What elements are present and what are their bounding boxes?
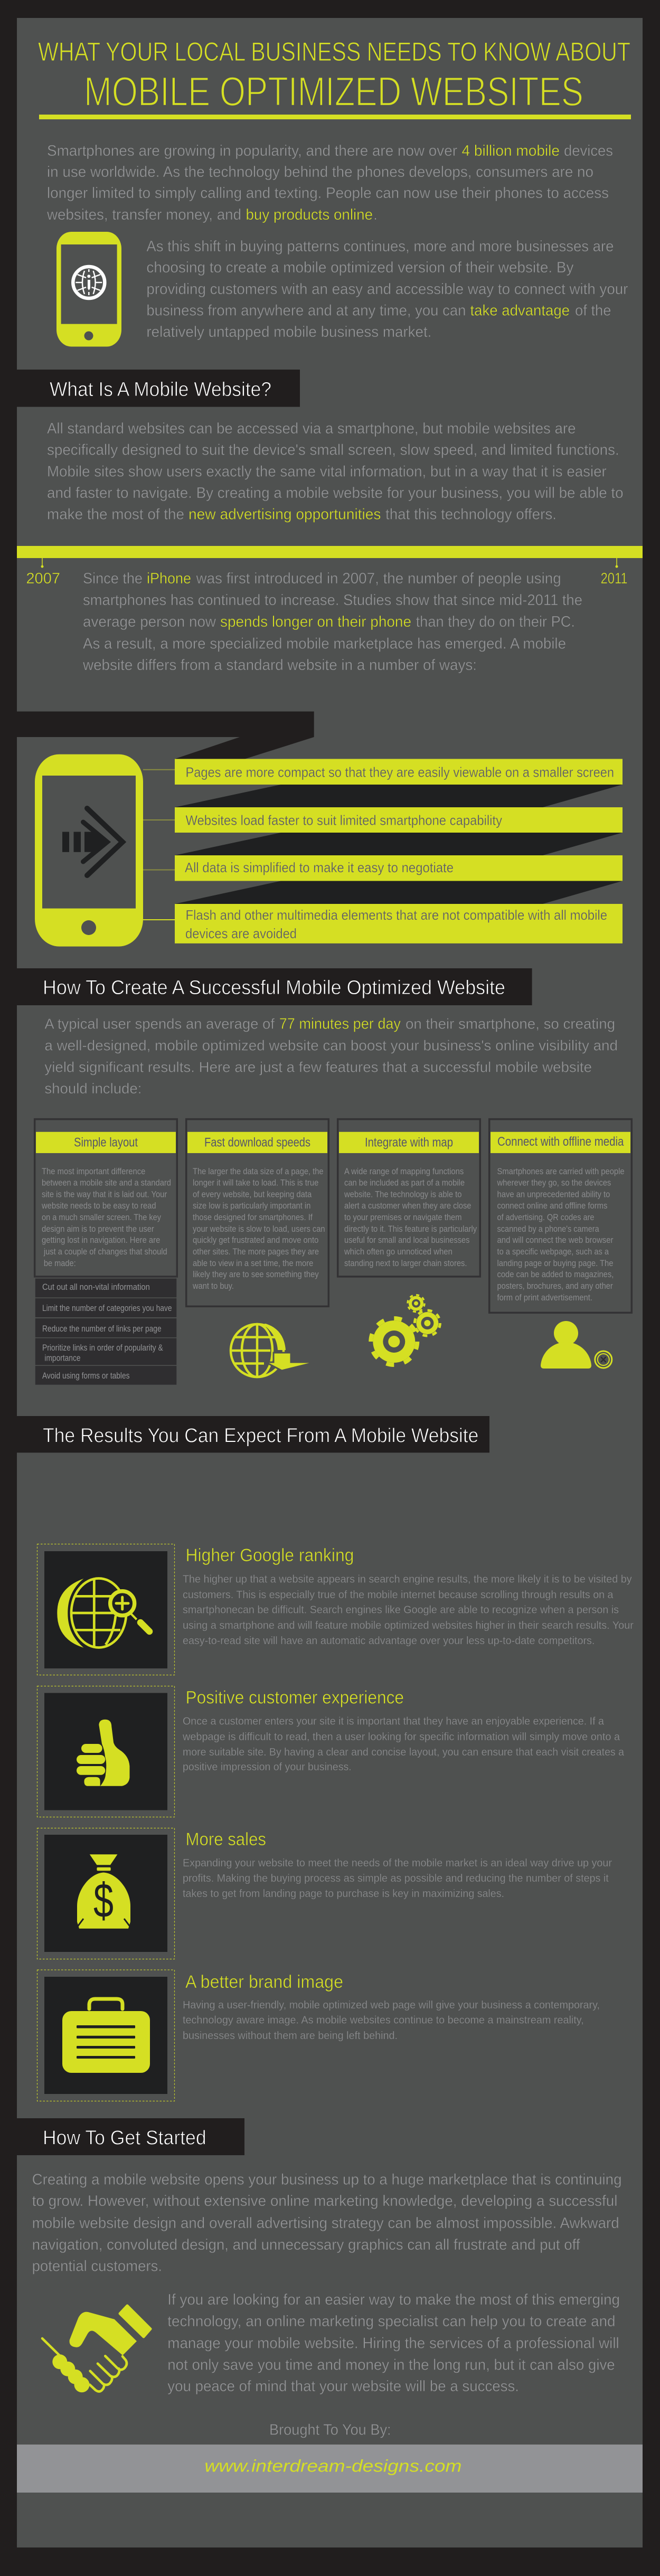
result: higher google ranking: The higher up that a website appears in search engine results, the more likely it is to be visited by [183,1573,632,1585]
shadow between bars one and two [175,785,623,807]
card: fast download speeds: longer it will take to load. This is true [193,1178,318,1188]
what is a mobile website paragraph: new advertising opportunities [188,506,381,523]
card: connect with offline media: wherever they go, so the devices [497,1178,611,1188]
dark empty heading bar with slanted shadow [17,712,314,759]
result: more sales: takes to get from landing page to purchase is key in maximizing sales. [183,1888,504,1900]
list: layout changes: Prioritize links in order of popularity & [42,1343,163,1353]
what is a mobile website paragraph: and faster to navigate. By creating a mobile website for your business, you will be able to [47,485,624,502]
what is a mobile website paragraph [47,420,624,523]
card: connect with offline media: of advertising. QR codes are [497,1213,595,1222]
intro paragraph: devices [564,143,613,159]
feature bar: simplified data: All data is simplified to make it easy to negotiate [185,860,454,875]
heading: how to get started [17,2118,244,2155]
intro paragraph: websites, transfer money, and [46,206,241,223]
footer url band: www.interdream-designs.com [204,2457,461,2476]
intro paragraph: buy products online [246,206,373,223]
iphone paragraph: website differs from a standard website in a number of ways: [82,657,477,674]
77 minutes paragraph: A typical user spends an average of [44,1016,275,1032]
specialist paragraph [167,2291,620,2395]
card: simple layout: on a much smaller screen. The key [42,1213,162,1222]
card: integrate with map: useful for small and local businesses [344,1235,469,1245]
feature bar: faster load [175,807,623,833]
card: connect with offline media: connect online and offline forms [497,1201,607,1211]
heading: how to create [17,968,532,1005]
result: more sales [37,1828,612,1959]
card: integrate with map: which often go unnoticed when [344,1247,452,1257]
card: fast download speeds: of every website, but keeping data [193,1190,312,1199]
list: layout changes: importance [44,1354,80,1363]
card: fast download speeds: able to view in a set time, the more [193,1259,313,1268]
card: connect with offline media: have an unprecedented ability to [497,1190,610,1199]
iphone paragraph: spends longer on their phone [220,614,411,630]
timeline band: 2011 [601,570,628,587]
icon: handshake [42,2306,150,2392]
intro paragraph: longer limited to simply calling and texting. People can now use their phones to access [47,185,609,202]
card: integrate with map: directly to it. This feature is particularly [344,1224,477,1234]
card: simple layout: The most important difference [42,1167,145,1176]
get started paragraph: navigation, convoluted design, and unnecessary graphics can all frustrate and put off [32,2237,580,2253]
specialist paragraph: manage your mobile website. Hiring the services of a professional will [167,2335,619,2352]
77 minutes paragraph: a well-designed, mobile optimized website can boost your business's online visibility and [44,1037,618,1054]
result: more sales: More sales [186,1829,266,1850]
card: connect with offline media: scanned by a phone's camera [497,1224,599,1234]
77 minutes paragraph [44,1016,618,1097]
iphone paragraph: Since the [83,570,143,587]
card: connect with offline media: code can be added to magazines, [497,1270,614,1279]
result: higher google ranking: easy-to-read site will have an automatic advantage over your less up-to-date competitors. [183,1635,595,1647]
what is a mobile website paragraph: that this technology offers. [385,506,557,523]
list: layout changes: Limit the number of categories you have [42,1304,172,1313]
card: fast download speeds: size low is particularly important in [193,1201,310,1211]
get started paragraph [32,2172,622,2275]
get started paragraph: to grow. However, without extensive online marketing knowledge, developing a successful [32,2193,618,2210]
icon tile: money bag: $ [93,1874,114,1928]
shift in buying paragraph: As this shift in buying patterns continues, more and more businesses are [146,238,614,255]
iphone paragraph: average person now [83,614,216,630]
card: connect with offline media: Connect with offline media [497,1135,624,1149]
result: positive customer experience: webpage is difficult to read, then a user looking for specific information will simply move onto a [182,1731,620,1743]
card: integrate with map: standing next to larger chain stores. [344,1259,467,1268]
card: integrate with map: to your premises or navigate them [344,1213,461,1222]
list: layout changes [35,1279,176,1385]
feature bar: faster load: Websites load faster to suit limited smartphone capability [186,812,502,828]
specialist paragraph: you peace of mind that your website will be a success. [167,2378,519,2395]
shift in buying paragraph: choosing to create a mobile optimized version of their website. By [146,259,574,276]
result: higher google ranking [37,1544,634,1675]
card: integrate with map [338,1119,480,1277]
heading: how to get started: How To Get Started [43,2127,206,2149]
icon: globe with download arrow [231,1324,316,1377]
card: fast download speeds: other sites. The more pages they are [193,1247,319,1257]
iphone paragraph: As a result, a more specialized mobile marketplace has emerged. A mobile [83,636,566,653]
card: simple layout: be made: [44,1259,76,1268]
card: fast download speeds: want to buy. [192,1281,234,1291]
intro paragraph: in use worldwide. As the technology behind the phones develops, consumers are no [47,164,593,181]
get started paragraph: Creating a mobile website opens your business up to a huge marketplace that is continuing [32,2172,622,2188]
intro paragraph: Smartphones are growing in popularity, and there are now over [47,143,457,159]
card: simple layout: between a mobile site and a standard [42,1178,171,1188]
shift in buying paragraph: relatively untapped mobile business market. [146,324,431,341]
what is a mobile website paragraph: All standard websites can be accessed via a smartphone, but mobile websites are [47,420,576,437]
77 minutes paragraph: should include: [44,1080,142,1097]
heading: what is a mobile website [17,370,300,407]
shift in buying paragraph: of the [575,303,611,319]
heading: the results: The Results You Can Expect From A Mobile Website [43,1424,478,1447]
card: fast download speeds: your website is slow to load, users can [193,1224,325,1234]
card: connect with offline media: and will connect the web browser [497,1235,614,1245]
card: fast download speeds: likely they are to see something they [193,1270,319,1279]
77 minutes paragraph: yield significant results. Here are just a few features that a successful mobile website [44,1059,592,1075]
icon: gears [371,1295,440,1365]
credit line: Brought To You By: [269,2422,391,2439]
get started paragraph: mobile website design and overall advertising strategy can be almost impossible. Awkward [32,2215,619,2232]
card: connect with offline media [489,1119,631,1313]
icon tile: briefcase [37,1970,174,2101]
shift in buying paragraph: business from anywhere and at any time, you can [146,303,466,319]
result: higher google ranking: smartphonecan be difficult. Search engines like Google are able to recognize when a person is [183,1604,619,1616]
iphone paragraph: than they do on their PC. [416,614,575,630]
heading: how to create: How To Create A Successful Mobile Optimized Website [43,977,505,999]
card: fast download speeds: those designed for smartphones. If [193,1213,313,1222]
list: layout changes: Avoid using forms or tables [42,1371,130,1381]
icon: phone with globe [56,232,121,346]
result: positive customer experience: positive impression of your business. [183,1761,352,1773]
result: higher google ranking: using a smartphone and will feature mobile optimized websites higher in their search results. Your [183,1619,634,1631]
card: simple layout: site is the way that it is laid out. Your [42,1190,167,1199]
card: simple layout: just a couple of changes that should [43,1247,167,1257]
what is a mobile website paragraph: Mobile sites show users exactly the same vital information, but in a way that it is easier [47,464,607,480]
feature bar: compact pages: Pages are more compact so that they are easily viewable on a smaller screen [186,765,614,780]
card: connect with offline media: form of print advertisement. [497,1293,592,1303]
specialist paragraph: If you are looking for an easier way to make the most of this emerging [167,2291,620,2308]
card: integrate with map: Integrate with map [365,1135,453,1150]
result: more sales: Expanding your website to meet the needs of the mobile market is an ideal way drive up your [183,1857,612,1869]
card: fast download speeds: The larger the data size of a page, the [193,1167,323,1176]
timeline band [17,546,643,587]
result: a better brand image [37,1970,600,2101]
specialist paragraph: technology, an online marketing specialist can help you to create and [167,2313,616,2330]
shadow between bars three and four [175,881,623,904]
77 minutes paragraph: 77 minutes per day [279,1016,401,1033]
feature bar: simplified data [175,855,623,881]
card: connect with offline media: Smartphones are carried with people [497,1167,625,1176]
card: integrate with map: can be included as part of a mobile [344,1178,465,1188]
card: integrate with map: A wide range of mapping functions [344,1167,464,1176]
list: layout changes: Reduce the number of links per page [42,1324,162,1334]
card: connect with offline media: to a specific webpage, such as a [497,1247,609,1257]
feature bar: flash avoided [175,904,623,943]
specialist paragraph: not only save you time and money in the long run, but it can also give [167,2357,615,2374]
iphone paragraph [82,570,582,674]
intro paragraph: 4 billion mobile [461,143,560,159]
intro paragraph [46,143,613,223]
list: layout changes: Cut out all non-vital information [42,1282,150,1292]
result: higher google ranking: Higher Google ranking [186,1545,354,1565]
shadow between bars two and three [175,833,623,855]
feature bar: compact pages [175,759,623,785]
heading: the results [17,1416,489,1452]
result: positive customer experience: Once a customer enters your site it is important that they have an enjoyable experience. If a [183,1715,605,1728]
card: simple layout: design aim is to prevent the user [42,1224,154,1234]
icon: large phone with forward arrow [35,754,175,947]
result: positive customer experience [37,1686,625,1817]
icon tile: globe with magnifier [37,1544,174,1675]
result: positive customer experience: more suitable site. By having a clear and concise layout, you can ensure that each visit creates a [183,1746,625,1758]
what is a mobile website paragraph: specifically designed to suit the device's small screen, slow speed, and limited functions. [47,442,619,459]
card: connect with offline media: landing page or buying page. The [497,1259,614,1268]
result: positive customer experience: Positive customer experience [186,1688,404,1708]
iphone paragraph: was first introduced in 2007, the number of people using [196,570,561,587]
timeline band: 2007 [26,570,60,587]
card: simple layout: website needs to be easy to read [41,1201,156,1211]
result: a better brand image: businesses without them are being left behind. [183,2030,398,2042]
result: a better brand image: Having a user-friendly, mobile optimized web page will give your business a contemporary, [183,1999,600,2011]
card: connect with offline media: posters, brochures, and any other [497,1281,613,1291]
footer url band [17,2445,643,2493]
card: integrate with map: alert a customer when they are close [344,1201,471,1211]
shift in buying paragraph: take advantage [470,303,570,319]
title [38,37,631,119]
card: fast download speeds: quickly get frustrated and move onto [193,1235,318,1245]
iphone paragraph: smartphones has continued to increase. Studies show that since mid-2011 the [83,592,582,609]
what is a mobile website paragraph: make the most of the [47,506,184,523]
result: a better brand image: technology aware image. As mobile websites continue to become a mainstream reality, [183,2014,584,2026]
card: simple layout [35,1119,177,1277]
card: simple layout: getting lost in navigation. Here are [42,1235,160,1245]
result: higher google ranking: customers. This is especially true of the mobile internet because scrolling through results on a [183,1589,614,1601]
card: simple layout: Simple layout [74,1135,138,1150]
intro paragraph: . [373,206,378,223]
get started paragraph: potential customers. [32,2258,162,2275]
result: more sales: profits. Making the buying process as simple as possible and reducing the number of steps it [183,1872,609,1884]
feature bar: flash avoided: devices are avoided [185,926,297,941]
result: a better brand image: A better brand image [185,1972,343,1992]
card: integrate with map: website. The technology is able to [344,1190,461,1199]
icon: person with badge [541,1321,612,1369]
iphone paragraph: iPhone [147,570,191,587]
icon tile: thumbs up [37,1686,174,1817]
icon tile: money bag [37,1828,174,1959]
heading: what is a mobile website: What Is A Mobile Website? [50,379,271,401]
shift in buying paragraph [146,238,628,341]
shift in buying paragraph: providing customers with an easy and accessible way to connect with your [146,281,628,298]
77 minutes paragraph: on their smartphone, so creating [406,1016,615,1032]
card: fast download speeds [186,1119,328,1306]
feature bar: flash avoided: Flash and other multimedia elements that are not compatible with all mobile [186,907,607,923]
card: fast download speeds: Fast download speeds [204,1135,310,1150]
